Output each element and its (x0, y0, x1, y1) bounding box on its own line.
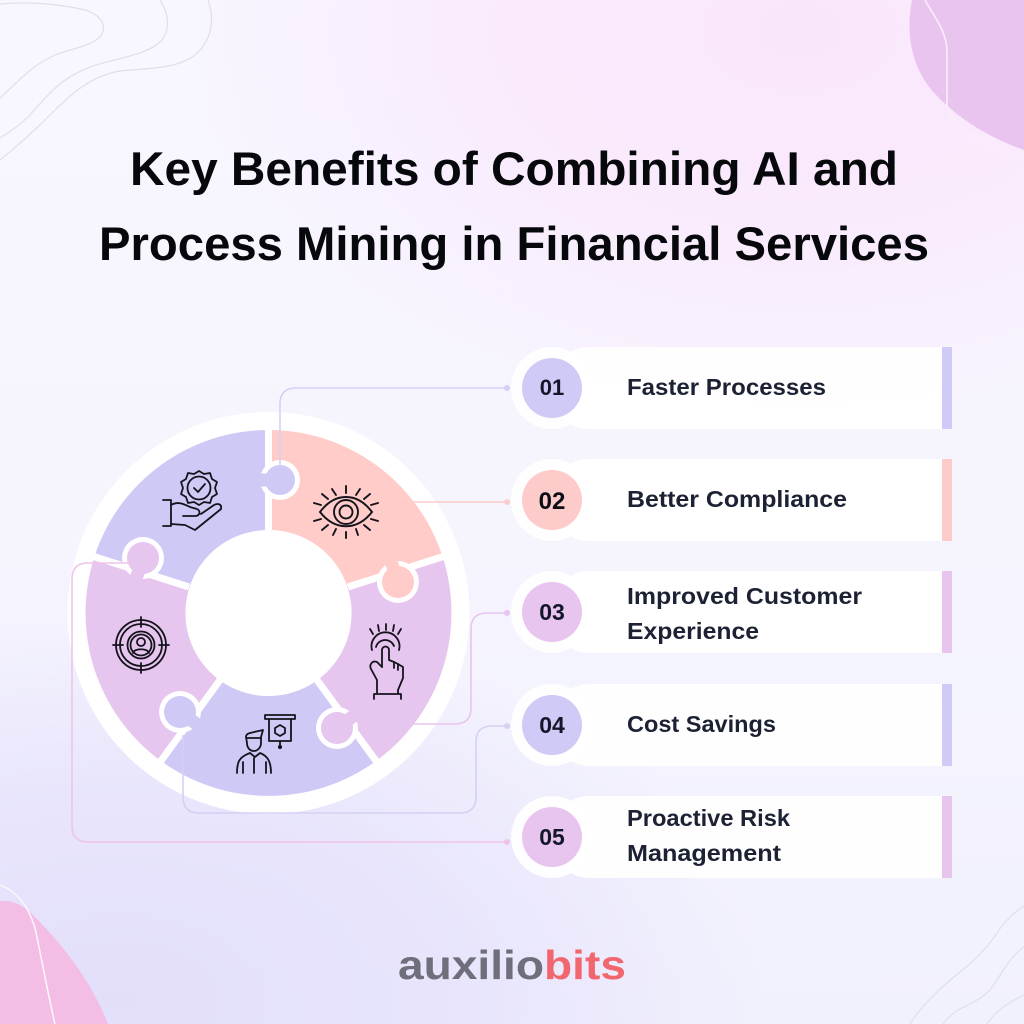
connector: 04 (183, 723, 510, 813)
card (549, 796, 942, 878)
label: Faster Processes (627, 374, 826, 400)
card (549, 459, 942, 541)
contour lines: top left (0, 0, 212, 160)
icon: finger tapping (370, 624, 403, 699)
row 01 (511, 347, 952, 429)
knob outlines (122, 460, 419, 749)
connector: 02 (413, 499, 510, 505)
decorative blob: top right (909, 0, 1024, 158)
connector: 01 (280, 385, 510, 466)
label: Better Compliance (627, 486, 847, 512)
segment 3 purple (317, 556, 451, 761)
number badge: 03 (539, 599, 565, 625)
label: Improved Customer (627, 583, 862, 609)
decorative blob: bottom left (0, 885, 108, 1024)
puzzle knobs (127, 465, 414, 744)
accent bar (942, 459, 952, 541)
number badge: 01 (540, 375, 564, 400)
icon: eye with rays (314, 486, 378, 538)
card (549, 684, 942, 766)
inner white circle (186, 530, 352, 696)
icon: hand holding badge (163, 471, 221, 530)
number badge: 02 (539, 488, 565, 515)
number badge (511, 347, 593, 429)
segment gaps (89, 425, 448, 765)
title: Process Mining in Financial Services (99, 217, 929, 270)
number badge: 04 (539, 712, 565, 738)
wheel white base ring (68, 412, 470, 814)
segment 5 purple (86, 556, 220, 761)
card (549, 347, 942, 429)
card (549, 571, 942, 653)
knob necks (136, 480, 398, 728)
accent bar (942, 796, 952, 878)
puzzle wheel (68, 412, 470, 814)
number badge: 05 (539, 824, 565, 850)
segment 4 lavender (161, 680, 376, 796)
segment 2 pink (268, 430, 442, 587)
label: Proactive Risk (627, 805, 790, 831)
row 04 (511, 684, 952, 766)
row 05 (511, 796, 952, 878)
label: Experience (627, 618, 759, 644)
row 03 (511, 571, 952, 653)
number badge (511, 684, 593, 766)
title: Key Benefits of Combining AI and (130, 142, 898, 195)
accent bar (942, 571, 952, 653)
row 02 (511, 459, 952, 541)
number badge (511, 796, 593, 878)
icon: person with presentation board (237, 715, 295, 773)
connector: 03 (413, 610, 510, 724)
contour lines: bottom right (910, 906, 1024, 1024)
title (99, 142, 929, 270)
segment 1 lavender (94, 430, 268, 587)
number badge (511, 571, 593, 653)
icon: target with person (113, 617, 169, 673)
logo: auxilio bits (398, 942, 626, 988)
connector: 05 (72, 563, 510, 845)
label: Cost Savings (627, 711, 776, 737)
number badge (511, 459, 593, 541)
accent bar (942, 347, 952, 429)
accent bar (942, 684, 952, 766)
label: Management (627, 840, 781, 866)
